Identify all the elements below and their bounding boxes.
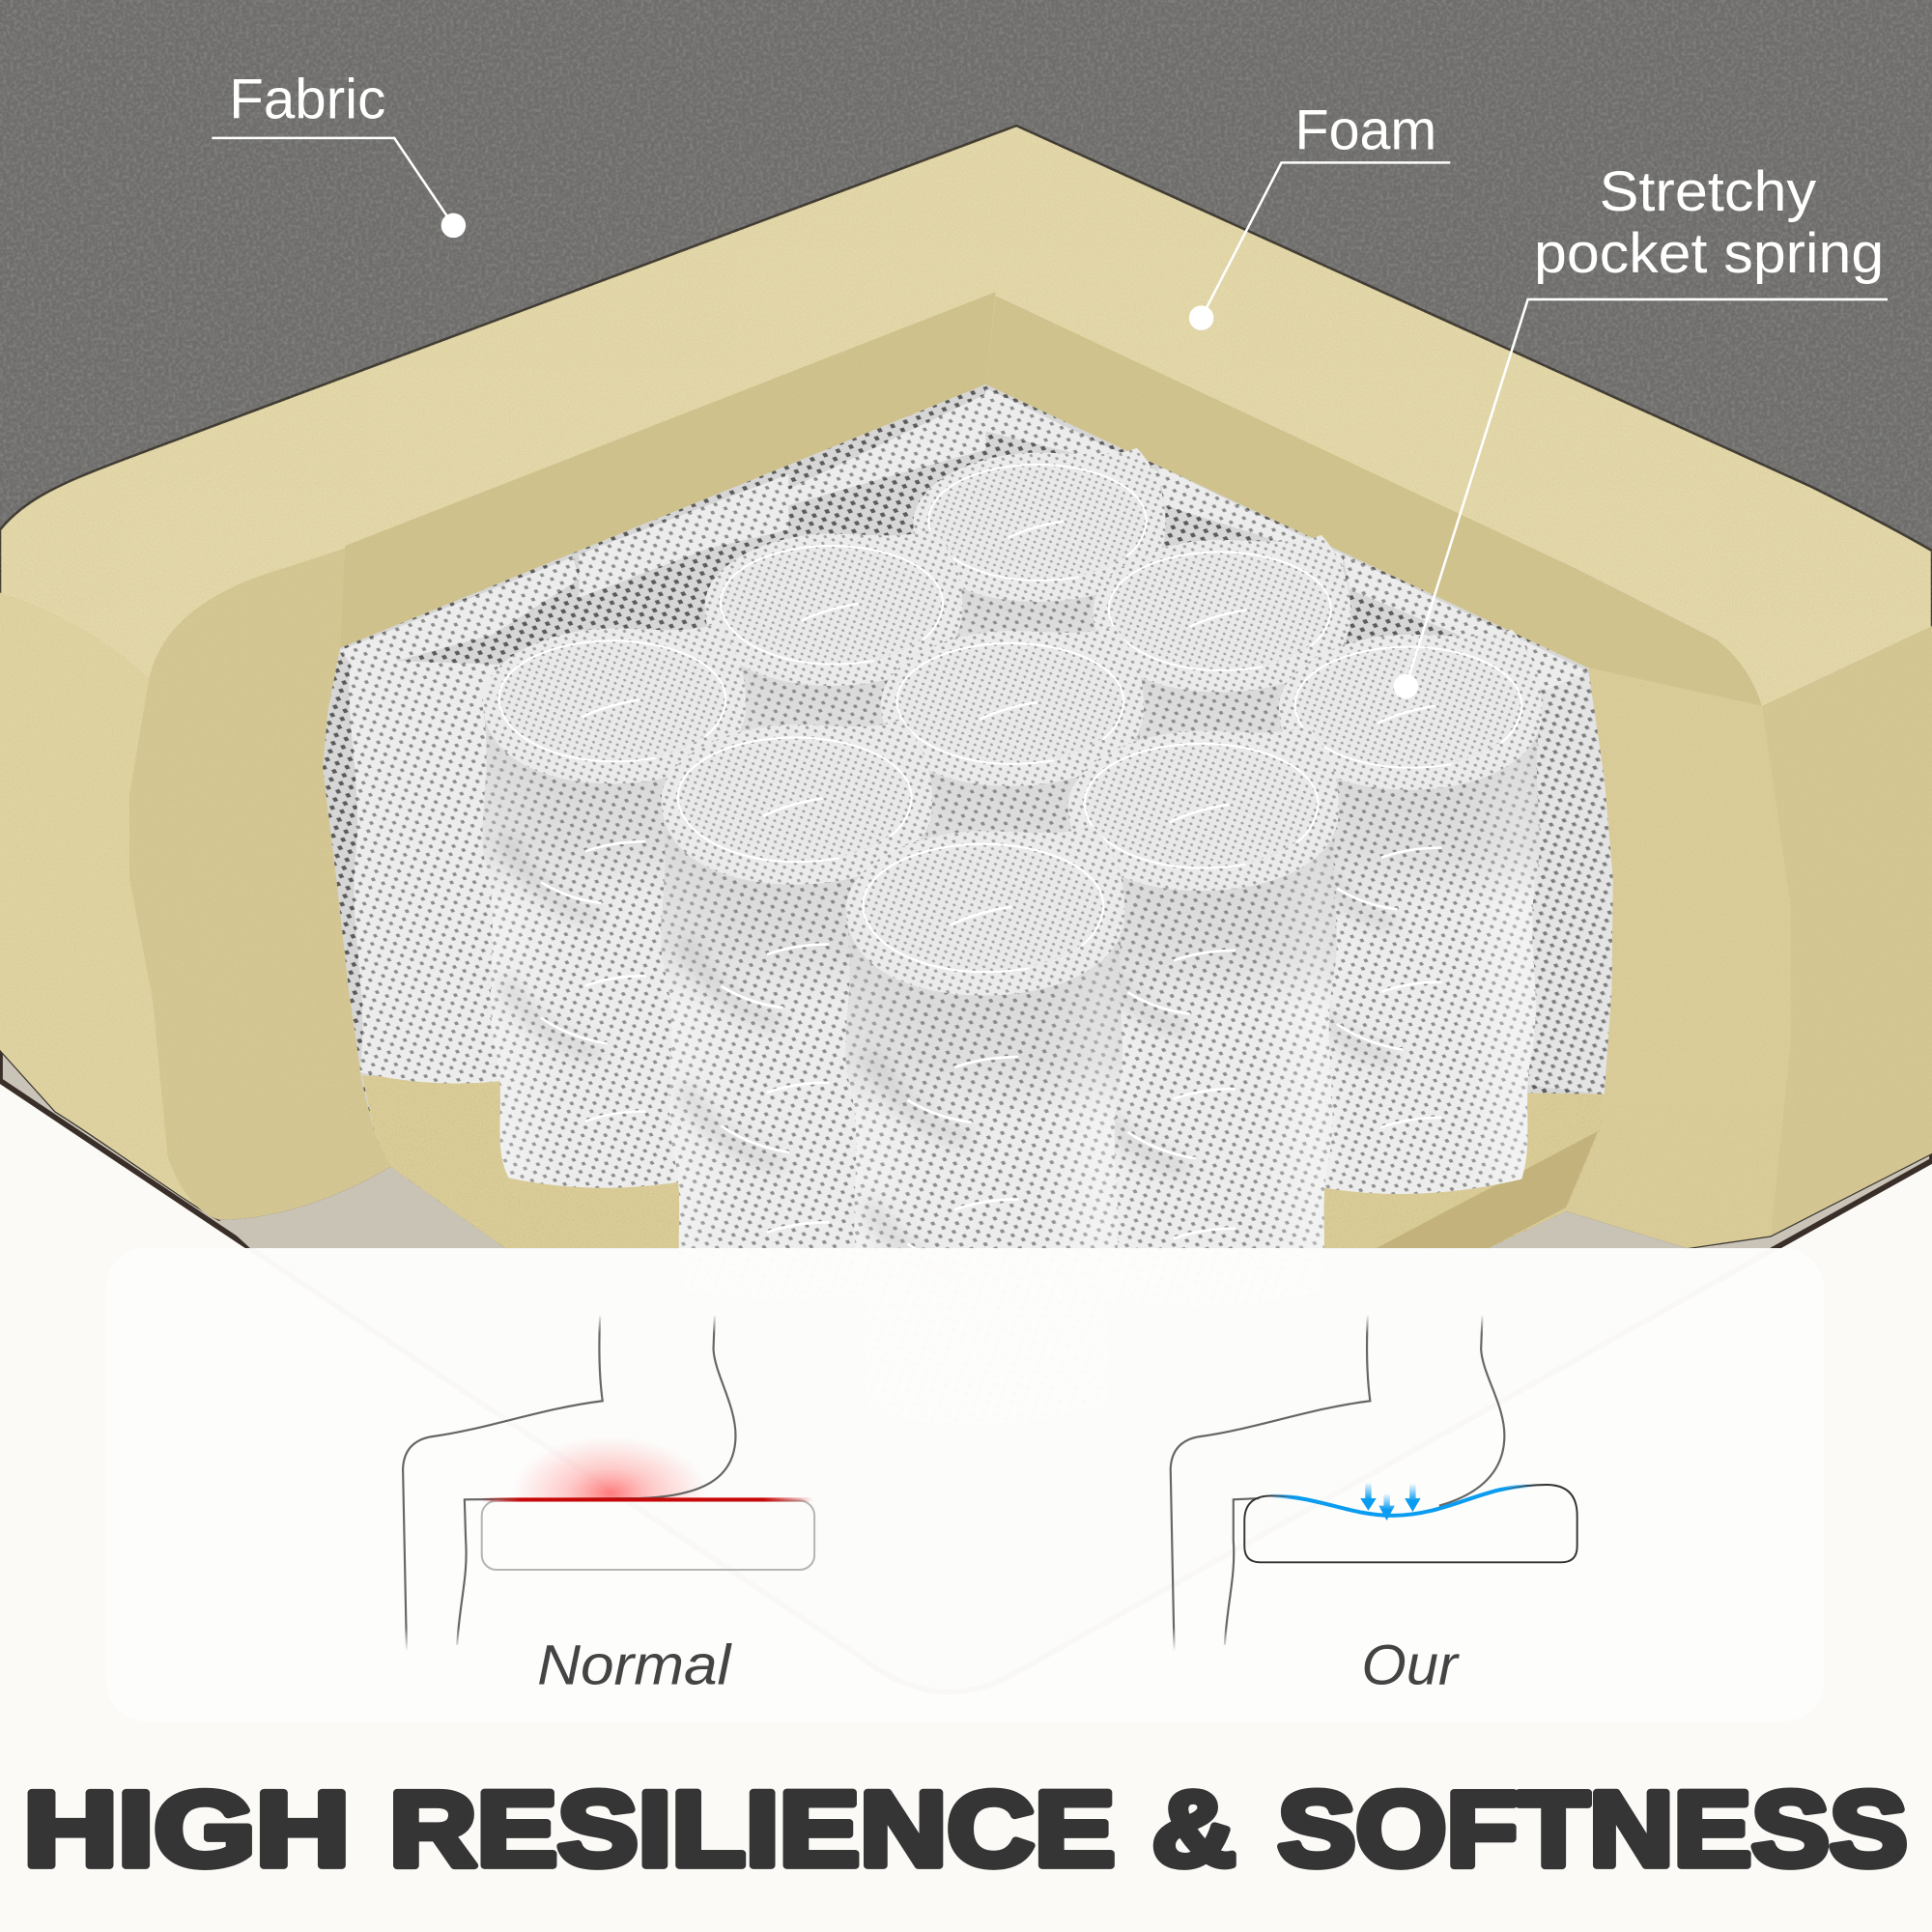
pocket spring middle row <box>482 623 1542 1194</box>
diagram: normal seat <box>403 1316 814 1697</box>
label: Stretchy pocket spring <box>1394 160 1888 698</box>
foam floor <box>362 1076 1605 1248</box>
seated figure outline <box>1171 1316 1504 1651</box>
foam right cut face <box>1566 668 1790 1248</box>
diagram: our seat <box>1171 1316 1577 1697</box>
foam left outer face <box>0 593 219 1220</box>
foam left inner wall <box>340 292 996 648</box>
comparison panel <box>106 1248 1824 1721</box>
pressure line <box>480 1497 813 1501</box>
title: & <box>1152 1771 1236 1889</box>
label: Foam <box>1189 99 1450 330</box>
title <box>23 1771 1907 1889</box>
foam right end face <box>1762 626 1932 1236</box>
beige base fabric right <box>1489 1211 1687 1248</box>
seated figure outline <box>403 1316 735 1651</box>
blue support line <box>1269 1486 1534 1516</box>
arrows <box>1360 1482 1421 1520</box>
label: Foam: Foam <box>1295 99 1436 161</box>
pocket spring front row <box>661 720 1339 1424</box>
foam floor wedge <box>1377 1131 1598 1248</box>
label: Fabric <box>212 68 466 238</box>
heat glow <box>522 1443 697 1497</box>
back right column <box>1521 666 1613 1094</box>
foam right inner wall <box>985 296 1762 706</box>
beige base fabric left <box>219 1167 505 1248</box>
foam left cut face <box>129 549 390 1220</box>
bottom fade overlay <box>0 1248 1932 1932</box>
pocket spring back row <box>704 448 1350 1089</box>
back row caps <box>340 388 1588 690</box>
title: SOFTNESS <box>1278 1771 1907 1889</box>
back left column <box>349 659 518 1084</box>
cushion <box>482 1501 814 1570</box>
spring cavity <box>323 384 1613 1248</box>
title: HIGH <box>23 1771 350 1889</box>
caption: Our: Our <box>1361 1634 1460 1697</box>
label: Stretchy pocket spring: Stretchy <box>1600 160 1817 223</box>
caption: Normal: Normal <box>537 1634 732 1697</box>
foam layer <box>0 124 1932 1248</box>
title: RESILIENCE <box>389 1771 1115 1889</box>
cushion <box>1244 1485 1577 1562</box>
label: Stretchy pocket spring: pocket spring <box>1534 222 1884 285</box>
label: Fabric: Fabric <box>229 68 385 130</box>
